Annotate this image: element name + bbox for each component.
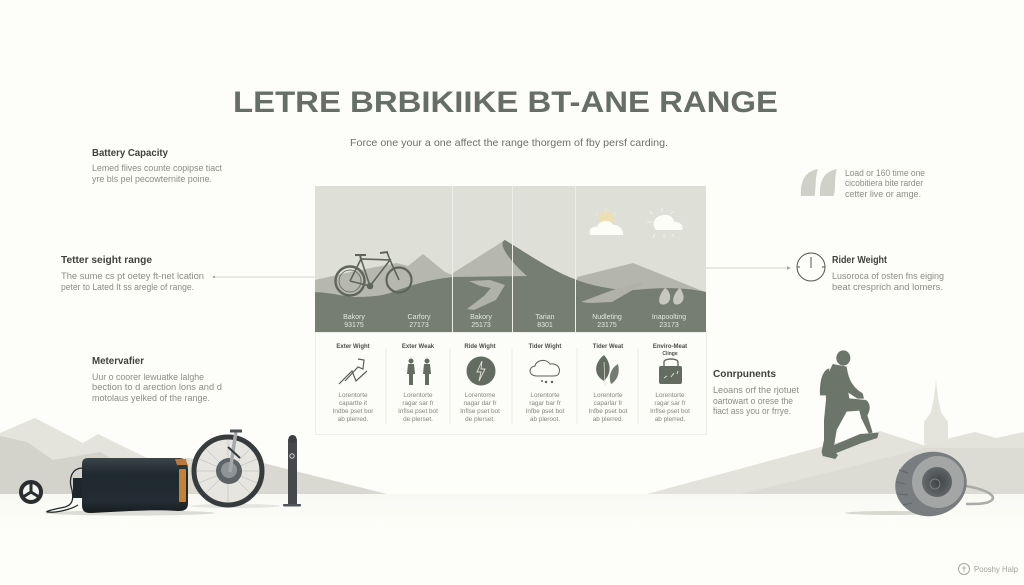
icon: lightning badge xyxy=(466,356,496,386)
card headings: Tider Wight xyxy=(529,344,561,350)
callout: load text: cicobitiera bite rarder xyxy=(845,178,923,188)
arrow: left callout to panel xyxy=(213,276,316,278)
callout: metervafier: Metervafier xyxy=(92,356,144,367)
icon: charging post xyxy=(283,435,301,506)
callout: components: Leoans orf the rjotuet xyxy=(713,385,799,395)
card body text: ab plerred. xyxy=(593,416,623,423)
terrain labels: Inapoolting xyxy=(652,314,686,321)
panel: factor cards xyxy=(316,332,706,434)
icon: tire xyxy=(845,444,993,524)
subtitle: Force one your a one affect the range thorgem of fby persf carding. xyxy=(350,137,668,149)
card body text: ab plerred. xyxy=(655,416,685,423)
card body text: Inflse pset bot xyxy=(460,408,500,415)
diagonal path xyxy=(581,282,643,303)
card body text: Lorentorte xyxy=(403,392,433,399)
card body text: Lorentorte xyxy=(593,392,623,399)
callout: rider weight: Rider Weight xyxy=(832,255,888,266)
panel: terrain illustration xyxy=(315,186,706,332)
card body text: Lorentorte xyxy=(530,392,560,399)
icon: two riders xyxy=(407,358,431,385)
icon: bicycle xyxy=(336,252,412,296)
callout: load text: cetter live or amge. xyxy=(845,189,921,199)
icon: trend chart xyxy=(339,359,367,384)
terrain labels: 8301 xyxy=(537,322,553,329)
card body text: de plerset. xyxy=(403,416,433,423)
callout: metervafier: Uur o coorer lewuatke lalghe xyxy=(92,372,204,382)
card headings xyxy=(336,344,687,357)
terrain labels: 25173 xyxy=(471,322,491,329)
card headings: Exter Weak xyxy=(402,344,435,350)
terrain labels: Bakory xyxy=(470,314,492,321)
card body text: de plerset. xyxy=(465,416,495,423)
icon: rider silhouette xyxy=(820,350,879,459)
card body text: ragar sar fr xyxy=(654,400,686,407)
central mountain light side xyxy=(453,240,527,278)
card body text: Indbe pset bor xyxy=(333,408,374,415)
icon: wheel with hub motor xyxy=(190,431,280,508)
icon: quote marks xyxy=(801,169,837,196)
icon: bright sun and cloud xyxy=(647,208,683,238)
card body text: Infbe pset bot xyxy=(526,408,565,415)
card body text: Infbe pset bot xyxy=(589,408,628,415)
callout: rider weight: Lusoroca of osten fns eiging xyxy=(832,271,944,281)
callout: metervafier: motolaus yelked of the range. xyxy=(92,393,210,403)
card body text: Inflse pset bot xyxy=(398,408,438,415)
green ground xyxy=(315,240,706,332)
callout: metervafier xyxy=(92,356,222,403)
icon: rain cloud xyxy=(530,360,559,383)
terrain labels: 93175 xyxy=(344,322,364,329)
card headings: Enviro-Meat xyxy=(653,344,687,350)
card headings: Ride Wight xyxy=(464,344,496,350)
footer badge: Pooshy Halp xyxy=(974,564,1018,574)
card body text: ragar sar fr xyxy=(402,400,434,407)
card body text: nagar dar fr xyxy=(463,400,497,407)
right mountain xyxy=(577,263,705,300)
terrain labels: Tarian xyxy=(535,314,555,321)
callout: components: oartowart o orese the xyxy=(713,396,793,406)
icon: tower silhouette xyxy=(924,380,948,444)
terrain labels: Nudleting xyxy=(592,314,622,321)
footer badge xyxy=(958,564,1018,574)
icon: lock bag xyxy=(659,359,682,384)
icon: small wheel xyxy=(21,482,41,502)
icon: leaves xyxy=(596,355,619,386)
icon: clock gauge xyxy=(797,253,825,281)
card headings: Exter Wight xyxy=(336,344,370,350)
icon: battery xyxy=(45,458,215,516)
card body text: ab plerred. xyxy=(338,416,368,423)
terrain labels: Bakory xyxy=(343,314,365,321)
card body text: Inflse pset bot xyxy=(650,408,690,415)
callout: battery capacity: Battery Capacity xyxy=(92,148,168,159)
callout: battery capacity: Lemed flives counte copipse tiact xyxy=(92,163,222,173)
title: LETRE BRBIKIIKE BT-ANE RANGE xyxy=(233,86,778,119)
callout: battery capacity: yre bls pel pecowternite poine. xyxy=(92,174,212,184)
callout: tetter seight range: The sume cs pt oetey ft-net lcation xyxy=(61,271,204,281)
floor xyxy=(0,494,1024,585)
callout: load text: Load or 160 time one xyxy=(845,168,925,178)
card body text: caparlar fr xyxy=(594,400,623,407)
card body text xyxy=(333,392,690,423)
panel dividers xyxy=(452,186,576,332)
callout: tetter seight range: peter to Lated It ss aregle of range. xyxy=(61,282,194,292)
callout: components: Conrpunents xyxy=(713,369,776,380)
card body text: Lorentome xyxy=(465,392,496,399)
card body text: Lorentorte xyxy=(338,392,368,399)
left background mountains xyxy=(0,418,387,494)
terrain labels xyxy=(343,314,686,329)
terrain labels: 23173 xyxy=(659,322,679,329)
terrain labels: Carfory xyxy=(408,314,431,321)
card body text: ab pleroot. xyxy=(530,416,560,423)
left distant hills xyxy=(315,254,453,300)
callout: load text xyxy=(845,168,925,199)
callout: rider weight: beat cresprich and lomers. xyxy=(832,282,943,292)
callout: battery capacity xyxy=(92,148,222,184)
arrow: panel to rider weight xyxy=(705,266,791,270)
callout: rider weight xyxy=(832,255,944,292)
icon: water drops xyxy=(659,288,684,305)
card body text: ragar bar fr xyxy=(529,400,562,407)
card headings: Clinge xyxy=(662,351,678,357)
callout: components: fiact ass you or frrye. xyxy=(713,406,791,416)
card headings: Tider Weat xyxy=(593,344,623,350)
terrain labels: 27173 xyxy=(409,322,429,329)
callout: metervafier: bection to d arection lons and d xyxy=(92,382,222,392)
icon: sun and cloud xyxy=(590,208,623,235)
card body text: capartte it xyxy=(339,400,367,407)
callout: components xyxy=(713,369,799,416)
callout: tetter seight range xyxy=(61,255,204,292)
callout: tetter seight range: Tetter seight range xyxy=(61,255,152,266)
terrain labels: 23175 xyxy=(597,322,617,329)
right background mountains xyxy=(647,431,1024,494)
card body text: Lorentorte xyxy=(655,392,685,399)
winding road xyxy=(467,280,505,310)
